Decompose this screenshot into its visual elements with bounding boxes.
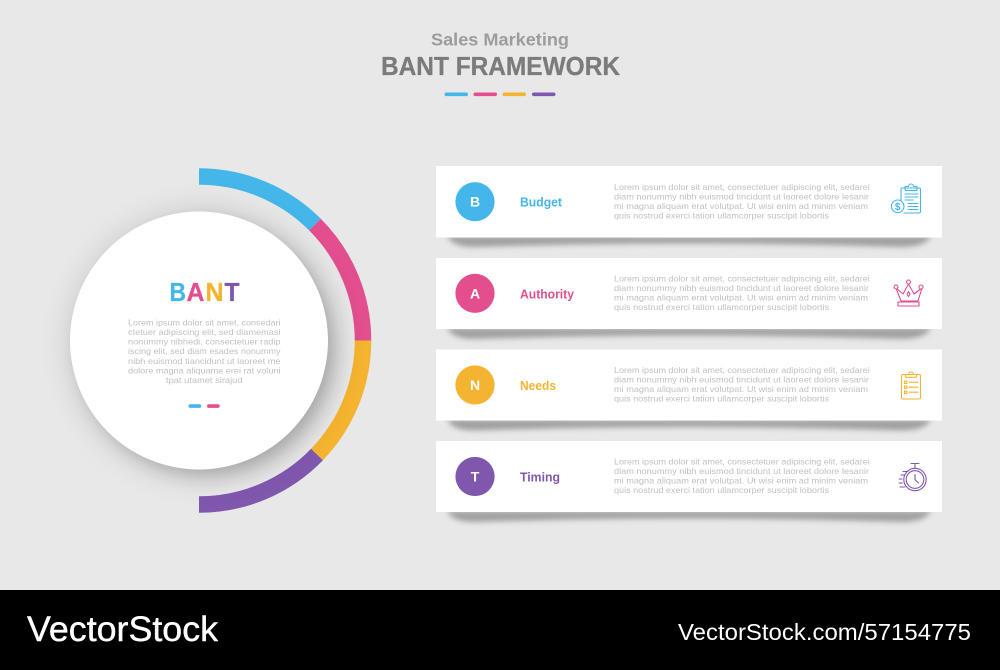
header — [381, 30, 620, 96]
subtitle: Sales Marketing — [431, 30, 569, 50]
text block: diam nonummy nibh euismod tincidunt ut laoreet dolore lesanir — [614, 283, 869, 293]
text block: central description: iscing elit, sed diam esades nonummy — [128, 346, 281, 356]
card — [436, 350, 942, 420]
text block: central description: tpat utamet sirajud — [166, 375, 243, 385]
icon: crown — [894, 280, 923, 306]
text block: central description: nonummy nibhedi, consectetuer radip — [128, 337, 281, 347]
icon: stopwatch — [899, 464, 926, 491]
title colour dashes — [444, 92, 556, 96]
text block: quis nostrud exerci tation ullamcorper suscipit lobortis — [614, 485, 829, 495]
panel: needs row — [436, 350, 942, 430]
arc: timing — [199, 454, 317, 505]
icon: clipboard with dollar coin: $ — [895, 202, 901, 213]
footer url: VectorStock.com/57154775 — [678, 619, 971, 645]
text block: Lorem ipsum dolor sit amet, consectetuer adipiscing elit, sedarei — [614, 274, 870, 284]
footer logo: VectorStock — [27, 610, 219, 649]
footer bar — [0, 590, 1000, 670]
heading: BANT: A — [186, 277, 205, 307]
title: BANT FRAMEWORK — [381, 51, 620, 81]
heading: BANT: T — [224, 277, 240, 307]
text block: mi magna aliquam erat volutpat. Ut wisi enim ad minim veniam — [614, 293, 868, 303]
segmented arc ring — [199, 176, 363, 505]
card shadow — [447, 511, 931, 522]
heading: BANT: N — [206, 277, 224, 307]
label: Timing — [520, 470, 560, 484]
badge A — [455, 274, 495, 313]
text block: central description: nibh euismod tiancidunt ut laoreet me — [128, 356, 281, 366]
text block: diam nonummy nibh euismod tincidunt ut laoreet dolore lesanir — [614, 375, 869, 385]
text block — [614, 274, 870, 312]
badge N: N — [470, 377, 480, 393]
circle dashes — [188, 404, 220, 408]
text block: quis nostrud exerci tation ullamcorper suscipit lobortis — [614, 302, 829, 312]
label: Needs — [520, 379, 556, 393]
arc: budget — [199, 176, 315, 225]
icon: checklist clipboard — [902, 372, 920, 399]
panel: budget row — [436, 166, 942, 247]
label: Authority — [520, 288, 574, 302]
text block: Lorem ipsum dolor sit amet, consectetuer adipiscing elit, sedarei — [614, 365, 870, 375]
panel: central circle — [70, 212, 328, 470]
text block — [614, 457, 870, 495]
badge T — [455, 457, 495, 496]
arc: needs — [317, 340, 363, 454]
card — [436, 166, 942, 238]
text block: diam nonummy nibh euismod tincidunt ut laoreet dolore lesanir — [614, 192, 869, 202]
badge B: B — [470, 194, 480, 210]
card — [436, 441, 942, 512]
text block: quis nostrud exerci tation ullamcorper suscipit lobortis — [614, 394, 829, 404]
badge T: T — [471, 468, 480, 484]
heading: BANT: B — [170, 277, 186, 307]
icon: clipboard with dollar coin — [891, 184, 920, 213]
badge B — [455, 182, 495, 221]
card shadow — [447, 328, 931, 339]
text block: Lorem ipsum dolor sit amet, consectetuer adipiscing elit, sedarei — [614, 457, 870, 467]
badge N — [455, 365, 495, 405]
text block: quis nostrud exerci tation ullamcorper suscipit lobortis — [614, 210, 829, 220]
text block: diam nonummy nibh euismod tincidunt ut laoreet dolore lesanir — [614, 466, 869, 476]
text block: mi magna aliquam erat volutpat. Ut wisi enim ad minim veniam — [614, 384, 868, 394]
panel: authority row — [436, 258, 942, 339]
card shadow — [447, 236, 931, 247]
circle drop shadow — [67, 208, 339, 480]
text block: mi magna aliquam erat volutpat. Ut wisi enim ad minim veniam — [614, 476, 868, 486]
text block: central description: Lorem ipsum dolor sit amet, consedari — [128, 318, 281, 328]
text block: central description — [128, 318, 281, 385]
text block — [614, 365, 870, 404]
panel: timing row — [436, 441, 942, 522]
text block: mi magna aliquam erat volutpat. Ut wisi enim ad minim veniam — [614, 201, 868, 211]
text block: Lorem ipsum dolor sit amet, consectetuer adipiscing elit, sedarei — [614, 182, 870, 192]
badge A: A — [470, 285, 480, 301]
label: Budget — [520, 196, 563, 210]
text block: central description: dolore magna aliquame erei rat voluni — [128, 365, 281, 375]
text block — [614, 182, 870, 220]
heading: BANT — [170, 277, 240, 307]
card — [436, 258, 942, 329]
card shadow — [447, 420, 931, 430]
text block: central description: ctetuer adipiscing elit, sed diamemasi — [128, 327, 281, 337]
arc: authority — [315, 225, 363, 340]
